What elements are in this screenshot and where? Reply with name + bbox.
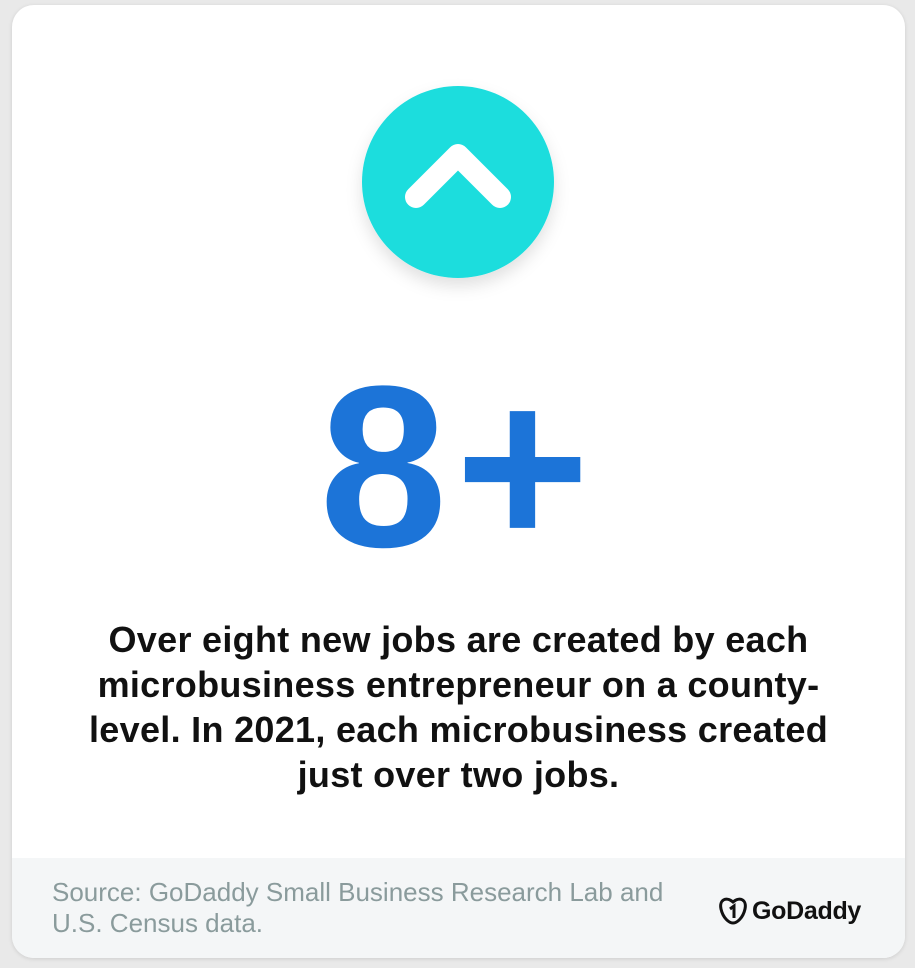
icon: up chevron circle: [358, 86, 558, 290]
description text: [89, 619, 828, 795]
description text: level. In 2021, each microbusiness created: [89, 709, 828, 750]
source text: U.S. Census data.: [52, 908, 263, 938]
description text: just over two jobs.: [298, 754, 619, 795]
big number: 8+: [319, 338, 598, 595]
description text: microbusiness entrepreneur on a county-: [98, 664, 819, 705]
logo: GoDaddy: GoDaddy: [752, 896, 861, 924]
source text: Source: GoDaddy Small Business Research Lab and: [52, 877, 663, 907]
footer: [12, 858, 905, 958]
description text: Over eight new jobs are created by each: [108, 619, 808, 660]
source text: [52, 877, 663, 938]
